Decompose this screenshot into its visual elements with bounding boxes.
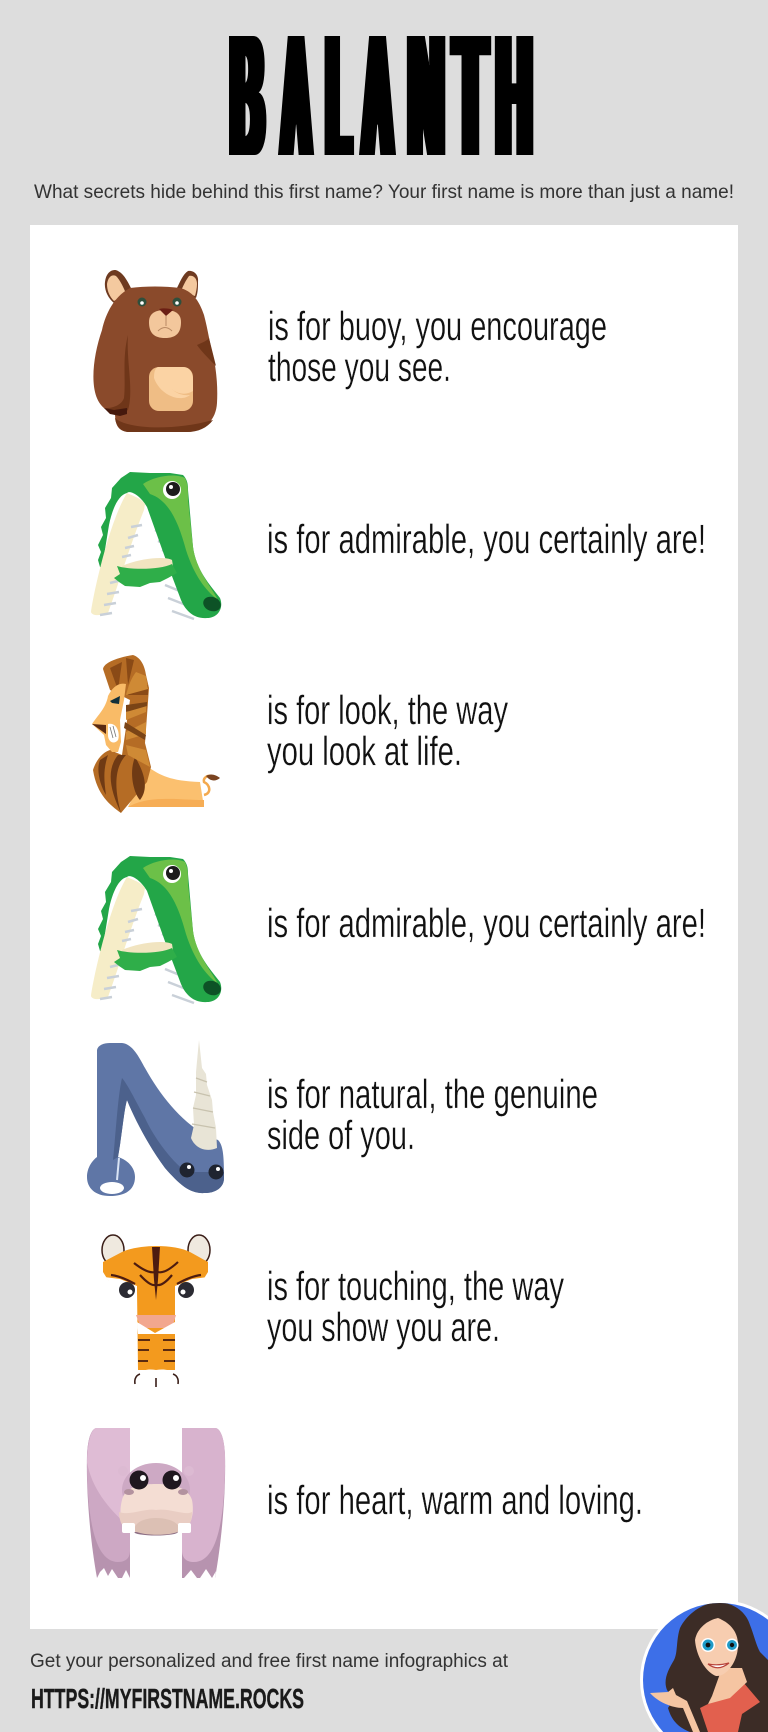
text: B line: is for buoy, you encourage (268, 303, 607, 349)
footer text: Get your personalized and free first name infographics at (30, 1651, 509, 1672)
icon: bear letter B (93, 270, 217, 432)
icon: crocodile letter A repeated (91, 856, 223, 1003)
text: N line (267, 1071, 598, 1158)
text: T line: is for touching, the way (267, 1263, 564, 1309)
panel: letters (30, 225, 738, 1629)
title: A (363, 0, 392, 192)
title: L (327, 0, 350, 192)
icon: hippo letter H (87, 1428, 225, 1578)
text: N line: side of you. (267, 1112, 415, 1158)
text: B line (268, 303, 607, 390)
text: L line: you look at life. (267, 728, 462, 774)
icon: tiger letter T (102, 1235, 210, 1387)
text: T line: you show you are. (267, 1304, 500, 1350)
text: T line (267, 1263, 564, 1350)
text: L line (267, 687, 508, 774)
title: A (282, 0, 310, 192)
text: B line: those you see. (268, 344, 451, 390)
icon: crocodile letter A (91, 472, 223, 619)
title: H (497, 0, 532, 192)
title: T (454, 0, 487, 193)
avatar (640, 1600, 768, 1732)
text: N line: is for natural, the genuine (267, 1071, 598, 1117)
subtitle: What secrets hide behind this first name? Your first name is more than just a name! (34, 181, 734, 203)
title (231, 0, 532, 193)
icon: narwhal letter N (87, 1040, 224, 1196)
title: N (409, 0, 444, 192)
title: B (231, 0, 263, 192)
icon: lion letter L (92, 655, 220, 813)
text: L line: is for look, the way (267, 687, 508, 733)
footer url: HTTPS://MYFIRSTNAME.ROCKS (31, 1683, 304, 1714)
